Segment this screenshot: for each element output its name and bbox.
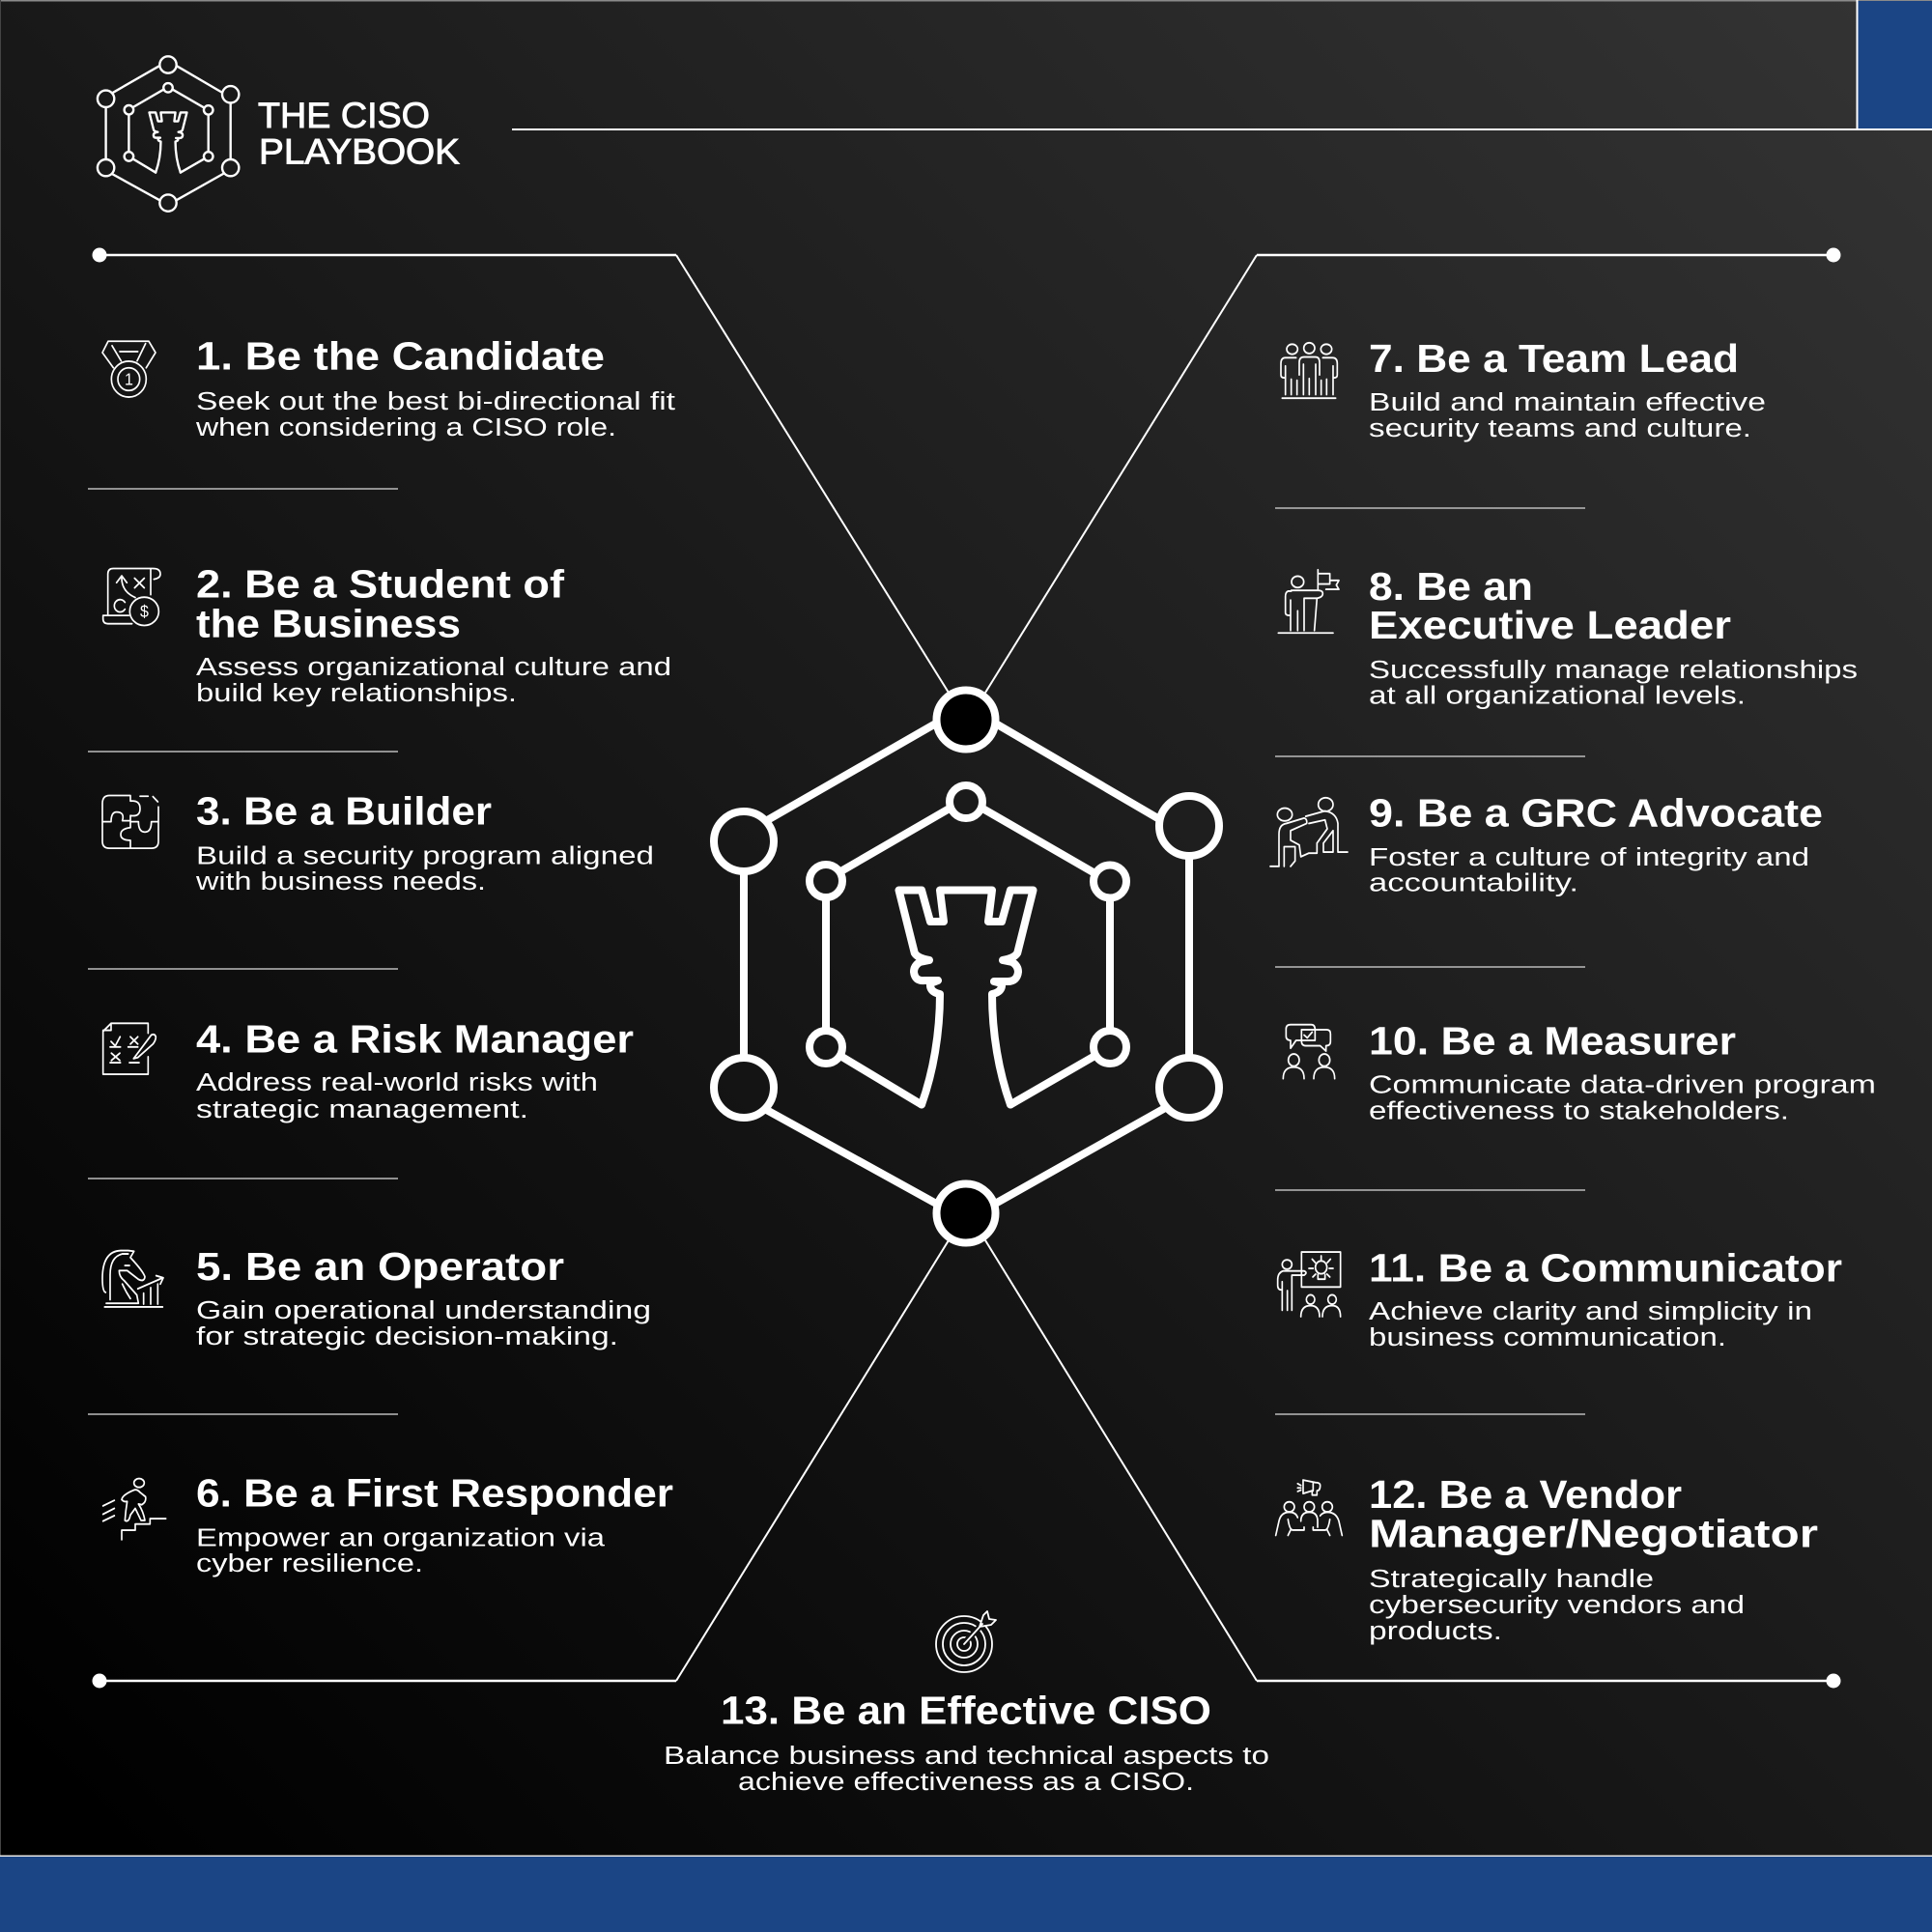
- description: when considering a CISO role.: [195, 414, 616, 441]
- logo emblem: [98, 56, 239, 212]
- heading: 9. Be a GRC Advocate: [1369, 791, 1823, 836]
- icon: target with arrow: [936, 1611, 996, 1672]
- description: [196, 1297, 651, 1350]
- description: [664, 1743, 1269, 1796]
- heading: 6. Be a First Responder: [196, 1471, 673, 1516]
- item 9: [1270, 791, 1823, 896]
- logo: [98, 56, 460, 212]
- dividers: [88, 489, 1585, 1414]
- icon: puzzle: [102, 796, 158, 848]
- item 11: [1278, 1246, 1842, 1351]
- icon: knight with growth chart: [102, 1251, 163, 1307]
- icon: chat with people: [1283, 1025, 1335, 1079]
- item 13: [664, 1611, 1269, 1796]
- description: accountability.: [1369, 869, 1578, 896]
- description: [196, 1524, 606, 1577]
- description: Strategically handle: [1369, 1566, 1654, 1593]
- heading: Executive Leader: [1369, 603, 1731, 647]
- description: cybersecurity vendors and: [1369, 1592, 1745, 1619]
- description: with business needs.: [195, 868, 486, 895]
- icon: medal: [102, 341, 156, 397]
- logo wordmark: THE CISO: [258, 96, 430, 135]
- description: Assess organizational culture and: [196, 654, 671, 681]
- description: Build a security program aligned: [196, 842, 654, 869]
- top-right blue block: [1858, 1, 1932, 128]
- heading: 1. Be the Candidate: [196, 334, 605, 379]
- description: Empower an organization via: [196, 1524, 606, 1551]
- description: business communication.: [1369, 1324, 1726, 1351]
- item 6: [103, 1471, 673, 1577]
- icon: scroll with coin: [103, 569, 160, 625]
- description: Achieve clarity and simplicity in: [1369, 1298, 1812, 1325]
- heading: 11. Be a Communicator: [1369, 1246, 1842, 1291]
- description: Seek out the best bi-directional fit: [196, 388, 675, 415]
- description: cyber resilience.: [196, 1550, 423, 1577]
- icon: runner on stairs: [103, 1479, 166, 1540]
- description: effectiveness to stakeholders.: [1369, 1097, 1789, 1124]
- icon: scroll with coin: $: [140, 602, 149, 621]
- description: security teams and culture.: [1369, 415, 1751, 442]
- icon: presenter with idea board: [1278, 1252, 1341, 1317]
- description: Build and maintain effective: [1369, 389, 1766, 416]
- heading: 2. Be a Student of: [196, 562, 564, 607]
- description: Communicate data-driven program: [1369, 1072, 1876, 1099]
- heading: [1369, 1472, 1818, 1556]
- icon: medal: 1: [125, 370, 133, 389]
- item 10: [1283, 1019, 1876, 1124]
- connector: top right: [985, 247, 1841, 693]
- description: [195, 388, 675, 441]
- connector: top left: [93, 247, 949, 693]
- description: [1369, 657, 1858, 709]
- heading: 8. Be an: [1369, 564, 1533, 609]
- description: at all organizational levels.: [1369, 682, 1746, 709]
- description: for strategic decision-making.: [196, 1323, 618, 1350]
- item 1: [102, 334, 675, 441]
- item 2: [103, 562, 671, 707]
- heading: 3. Be a Builder: [196, 789, 492, 834]
- icon: checklist with pen: [103, 1023, 156, 1074]
- description: build key relationships.: [196, 680, 517, 707]
- description: [1369, 389, 1766, 442]
- heading: [196, 562, 564, 646]
- description: Address real-world risks with: [196, 1069, 598, 1096]
- item 7: [1281, 336, 1766, 442]
- bottom blue band: [0, 1855, 1932, 1932]
- heading: Manager/Negotiator: [1369, 1512, 1818, 1556]
- item 8: [1278, 564, 1858, 709]
- description: [1369, 1566, 1745, 1645]
- icon: megaphone and people at table: [1276, 1480, 1342, 1535]
- heading: 12. Be a Vendor: [1369, 1472, 1682, 1517]
- icon: leader with flag: [1278, 570, 1339, 633]
- description: Successfully manage relationships: [1369, 657, 1858, 684]
- heading: the Business: [196, 602, 461, 646]
- heading: 10. Be a Measurer: [1369, 1019, 1736, 1064]
- description: achieve effectiveness as a CISO.: [738, 1769, 1194, 1796]
- item 12: [1276, 1472, 1818, 1645]
- item 4: [103, 1017, 634, 1123]
- central emblem: hexagon with rook: [714, 690, 1219, 1242]
- logo wordmark: [258, 96, 460, 172]
- description: [1369, 844, 1809, 896]
- description: [1369, 1298, 1812, 1351]
- item 3: [102, 789, 654, 895]
- description: [196, 1069, 598, 1123]
- heading: 13. Be an Effective CISO: [721, 1689, 1211, 1733]
- item 5: [102, 1244, 651, 1350]
- description: [195, 842, 654, 895]
- description: Gain operational understanding: [196, 1297, 651, 1324]
- description: Balance business and technical aspects to: [664, 1743, 1269, 1770]
- logo wordmark: PLAYBOOK: [259, 131, 460, 172]
- heading: 7. Be a Team Lead: [1369, 336, 1739, 381]
- icon: rook: [898, 891, 1034, 1105]
- connector: bottom right: [985, 1240, 1841, 1689]
- heading: 4. Be a Risk Manager: [196, 1017, 634, 1062]
- description: [196, 654, 671, 707]
- description: strategic management.: [196, 1096, 528, 1123]
- description: Foster a culture of integrity and: [1369, 844, 1809, 871]
- description: products.: [1369, 1618, 1502, 1645]
- icon: team: [1281, 343, 1337, 398]
- heading: [1369, 564, 1731, 647]
- description: [1369, 1072, 1876, 1124]
- heading: 5. Be an Operator: [196, 1244, 564, 1289]
- connector: bottom left: [93, 1240, 949, 1689]
- icon: two people with shield: [1270, 798, 1348, 867]
